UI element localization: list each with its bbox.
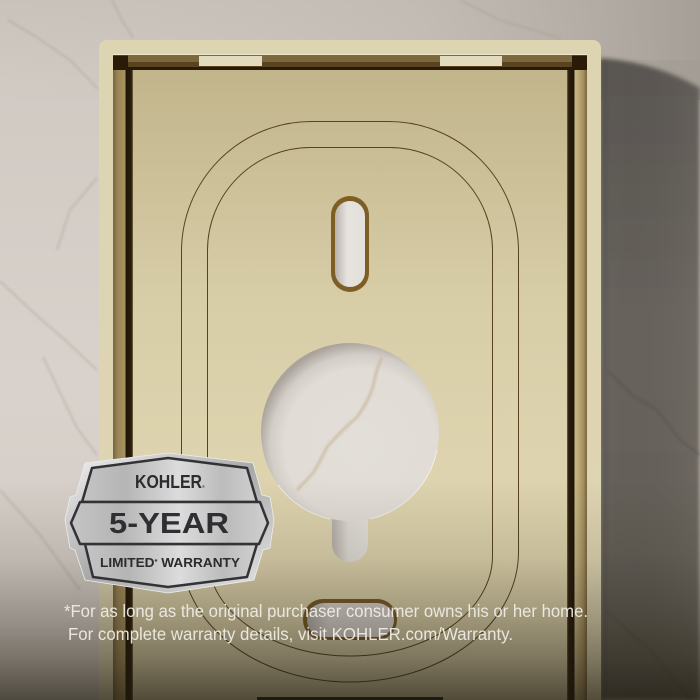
warranty disclaimer <box>64 601 588 644</box>
warranty badge <box>65 453 274 593</box>
bottom vignette <box>0 480 700 700</box>
badge upper panel <box>82 458 257 502</box>
warranty term: 5-YEAR <box>109 508 229 540</box>
back panel <box>133 70 567 700</box>
top tabs <box>199 56 502 66</box>
mounting plate frame <box>99 40 601 700</box>
lower slot <box>303 599 397 640</box>
embossed inner outline <box>208 148 492 656</box>
warranty disclaimer: *For as long as the original purchaser consumer owns his or her home. <box>64 601 588 621</box>
warranty type: * <box>155 559 158 566</box>
badge silver body <box>65 453 274 593</box>
badge lower panel <box>85 544 257 587</box>
warranty disclaimer: For complete warranty details, visit KOHLER.com/Warranty. <box>68 624 513 644</box>
upper slot <box>331 196 369 292</box>
badge middle band <box>71 502 268 544</box>
bottom dark element <box>257 697 443 700</box>
registered mark: ® <box>202 484 205 489</box>
warranty type: LIMITED <box>100 556 150 570</box>
warranty type: WARRANTY <box>157 556 241 570</box>
recessed opening <box>113 54 587 700</box>
cast shadow on wall <box>600 58 700 700</box>
brand name: KOHLER <box>135 471 202 492</box>
keyhole opening <box>261 343 439 562</box>
embossed outer outline <box>182 122 518 682</box>
